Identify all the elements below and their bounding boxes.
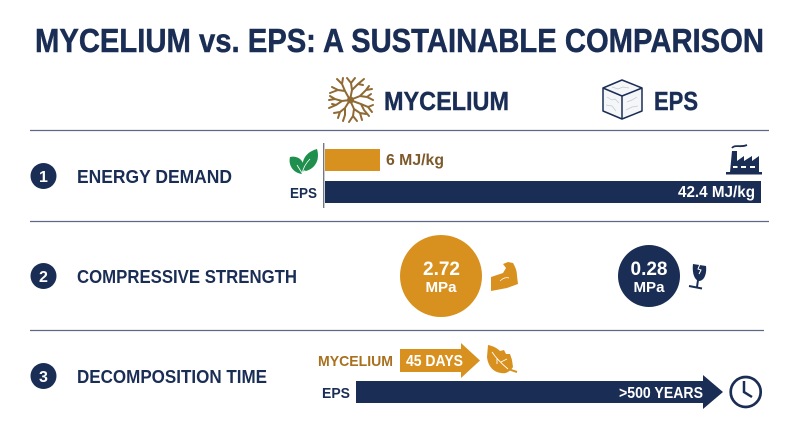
row heading: compressive strength: COMPRESSIVE STRENGTH bbox=[77, 266, 297, 287]
EPS circle: 0.28 MPa: 0.28 bbox=[630, 259, 668, 280]
label: mycelium: MYCELIUM bbox=[384, 88, 509, 116]
arrow: over 500 years: >500 YEARS bbox=[619, 385, 703, 402]
EPS circle: 0.28 MPa: MPa bbox=[634, 279, 665, 296]
column header: EPS bbox=[603, 80, 698, 119]
mycelium circle: 2.72 MPa bbox=[400, 235, 482, 317]
row 1: energy demand bbox=[30, 143, 762, 208]
number badge 2: 2 bbox=[39, 269, 48, 286]
arrow: 45 days bbox=[400, 343, 480, 378]
bar: mycelium 6 MJ/kg bbox=[325, 149, 380, 171]
icon: foam cube bbox=[603, 80, 642, 119]
icon: green leaves bbox=[290, 149, 318, 174]
bar label: EPS: EPS bbox=[290, 185, 317, 202]
arrow label: EPS: EPS bbox=[322, 385, 350, 402]
icon: broken glass bbox=[689, 264, 706, 288]
icon: clock bbox=[731, 377, 761, 407]
label: EPS: EPS bbox=[654, 88, 698, 116]
row 3: decomposition time bbox=[30, 343, 761, 409]
arrow label: mycelium: MYCELIUM bbox=[318, 353, 393, 370]
number badge 3: 3 bbox=[39, 369, 48, 386]
number badge 1 bbox=[30, 163, 56, 189]
number badge 2 bbox=[30, 263, 56, 289]
row 2: compressive strength bbox=[30, 235, 706, 317]
EPS circle: 0.28 MPa bbox=[618, 245, 680, 307]
arrow: 45 days: 45 DAYS bbox=[406, 353, 463, 370]
icon: mycelium network bbox=[329, 78, 373, 122]
number badge 3 bbox=[30, 363, 56, 389]
arrow: over 500 years bbox=[356, 375, 723, 409]
number badge 1: 1 bbox=[39, 169, 48, 186]
icon: flexed arm bbox=[491, 262, 518, 291]
bar: EPS 42.4 MJ/kg bbox=[325, 181, 761, 203]
row heading: energy demand: ENERGY DEMAND bbox=[77, 166, 232, 187]
axis line bbox=[323, 143, 325, 208]
column header: mycelium bbox=[329, 78, 509, 122]
mycelium circle: 2.72 MPa: MPa bbox=[426, 279, 457, 296]
icon: factory bbox=[726, 145, 762, 174]
value: 42.4 MJ/kg: 42.4 MJ/kg bbox=[678, 184, 755, 201]
mycelium circle: 2.72 MPa: 2.72 bbox=[423, 259, 460, 280]
value: 6 MJ/kg: 6 MJ/kg bbox=[386, 152, 444, 169]
icon: decaying leaf bbox=[487, 345, 517, 373]
row heading: decomposition time: DECOMPOSITION TIME bbox=[77, 366, 267, 387]
